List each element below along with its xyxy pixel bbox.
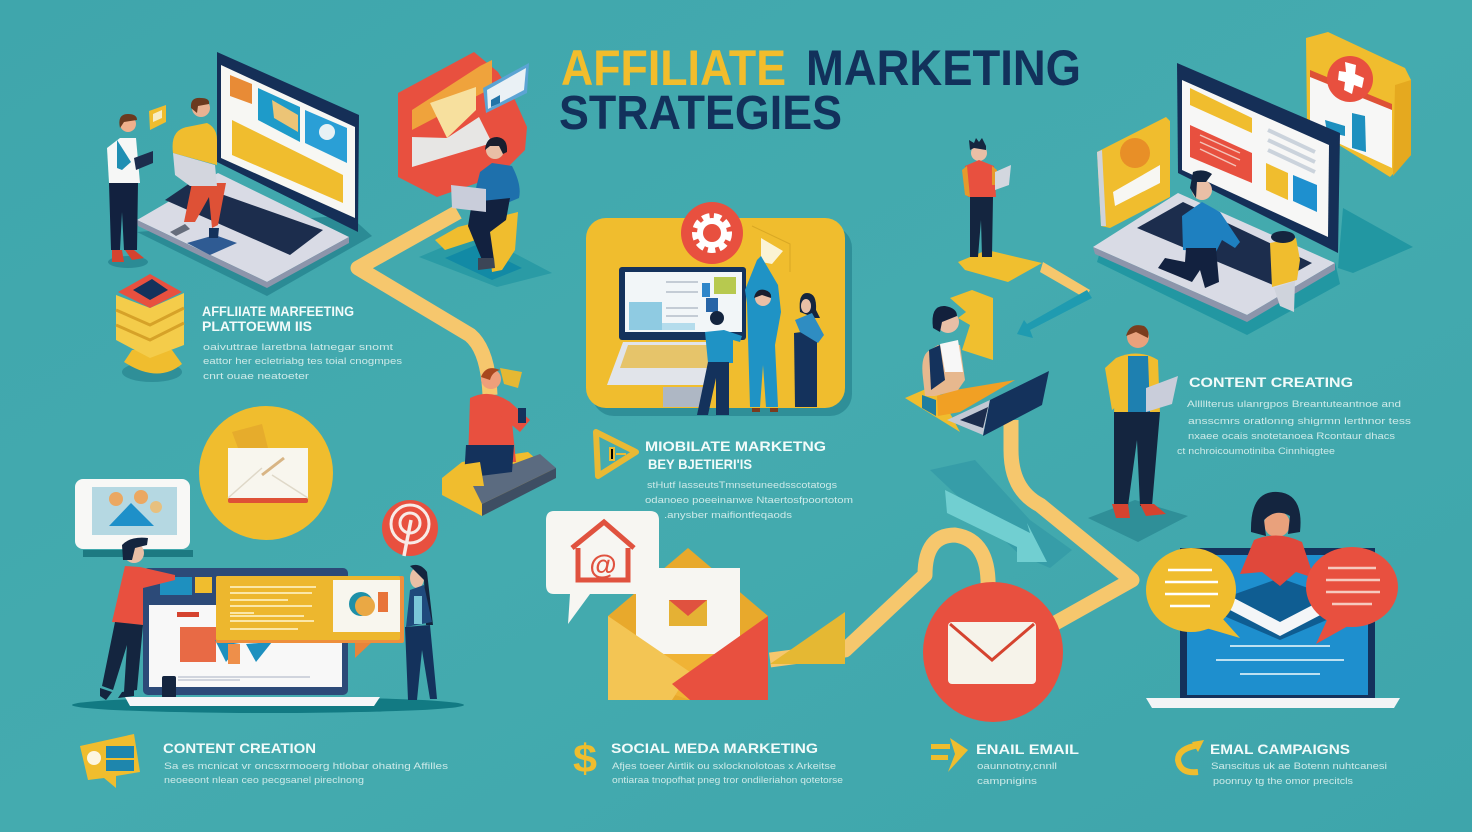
card: yellow shield left bbox=[1097, 117, 1170, 228]
text: affiliate marketing platforms: AFFLIIATE MARFEETING bbox=[202, 303, 354, 319]
text: email campaigns: Sanscitus uk ae Botenn nuhtcanesi bbox=[1211, 761, 1387, 772]
icon: speed arrow bbox=[931, 738, 968, 772]
illustration: top right laptop scene bbox=[1093, 32, 1413, 335]
title: AFFILIATE bbox=[561, 40, 786, 96]
text: email email: ENAIL EMAIL bbox=[976, 741, 1080, 757]
icon: yellow box with coins bbox=[1270, 231, 1300, 312]
card: red cross bbox=[1306, 32, 1411, 177]
text: affiliate marketing platforms: cnrt ouae neatoeter bbox=[203, 371, 309, 382]
text: content creating: Alllllterus ulanrgpos Breantuteantnoe and bbox=[1187, 399, 1401, 410]
icon: yellow play triangle bbox=[596, 432, 636, 476]
text: mobilate marketing: stHutf IasseutsTmnsetuneedsscotatogs bbox=[647, 480, 837, 491]
text: mobilate marketing: MIOBILATE MARKETNG bbox=[645, 438, 826, 454]
envelope bbox=[608, 548, 768, 700]
illustration: person on platform with phone bbox=[442, 368, 556, 516]
illustration: bubble and open envelope bbox=[546, 511, 768, 700]
people group bbox=[697, 256, 824, 415]
text: content creation: Sa es mcnicat vr oncsxrmooerg htlobar ohating Affilles bbox=[164, 761, 448, 772]
text: social media marketing bbox=[611, 740, 843, 786]
speech bubble with photo bbox=[75, 479, 193, 557]
connector path: right upper arrow bbox=[950, 262, 1092, 360]
icon: red gear bbox=[681, 202, 743, 264]
title bbox=[559, 40, 1081, 140]
icon: dollar sign: $ bbox=[573, 737, 597, 781]
person: seated with laptop bbox=[419, 137, 552, 287]
person: standing man with tablet bbox=[107, 114, 153, 268]
icon: play tag bbox=[752, 226, 790, 272]
text: mobilate marketing: odanoeo poeeinanwe Ntaertosfpoortotom bbox=[645, 495, 853, 506]
illustration: top centre-right standing man bbox=[958, 138, 1042, 282]
text: affiliate marketing platforms: eattor her ecletriabg tes toial cnogmpes bbox=[203, 356, 402, 367]
title: STRATEGIES bbox=[559, 87, 842, 140]
text: mobilate marketing bbox=[645, 438, 853, 521]
text: content creation: CONTENT CREATION bbox=[163, 740, 316, 756]
speech card: yellow text bbox=[216, 576, 404, 658]
text: content creating: ct nchroicoumotiniba Cinnhiqgtee bbox=[1177, 446, 1335, 457]
arrow: olive triangle bbox=[770, 612, 845, 664]
illustration: woman seated at laptop bbox=[905, 306, 1049, 436]
text: email email: campnigins bbox=[977, 776, 1037, 787]
person: seated man on laptop bbox=[170, 98, 226, 238]
person: man pointing bbox=[100, 538, 175, 700]
text: social media marketing: SOCIAL MEDA MARKETING bbox=[611, 740, 818, 756]
icon: yellow C with arrow bbox=[1178, 740, 1204, 772]
text: email campaigns: poonruy tg the omor precitcls bbox=[1213, 776, 1353, 787]
connector path: top left ribbon bbox=[358, 212, 490, 395]
text: content creation: neoeeont nlean ceo pecgsanel pireclnong bbox=[164, 775, 364, 786]
illustration: top left laptop scene bbox=[107, 52, 372, 296]
icon: yellow circle envelope bbox=[199, 406, 333, 540]
icon: small yellow chat bbox=[149, 105, 166, 130]
text: affiliate marketing platforms: PLATTOEWM IIS bbox=[202, 318, 312, 334]
text: email email bbox=[976, 741, 1080, 787]
person: kneeling man bbox=[1158, 170, 1240, 288]
speech bubble: red bbox=[1306, 547, 1398, 644]
text: affiliate marketing platforms: oaivuttrae laretbna latnegar snomt bbox=[203, 342, 393, 353]
laptop with screen bbox=[125, 568, 380, 706]
icon: stacked yellow layers bbox=[116, 274, 184, 382]
text: affiliate marketing platforms bbox=[202, 303, 402, 382]
text: email campaigns: EMAL CAMPAIGNS bbox=[1210, 741, 1350, 757]
title: MARKETING bbox=[806, 40, 1081, 96]
person: woman bbox=[405, 565, 437, 700]
text: email campaigns bbox=[1210, 741, 1387, 787]
panel: mobile marketing yellow card bbox=[586, 202, 852, 416]
speech bubble: home at: @ bbox=[589, 549, 617, 580]
speech bubble: home at bbox=[546, 511, 659, 624]
icon: pinterest pin bbox=[382, 500, 438, 556]
text: content creating bbox=[1177, 374, 1411, 457]
illustration: red isometric envelope with person bbox=[398, 52, 552, 287]
text: mobilate marketing: BEY BJETIERI'IS bbox=[648, 456, 752, 472]
text: content creation bbox=[163, 740, 448, 786]
speech bubble: yellow bbox=[1146, 548, 1240, 638]
text: social media marketing: ontiaraa tnopofhat pneg tror ondileriahon qotetorse bbox=[612, 775, 843, 786]
text: content creating: ansscmrs oratlonng shigrmn lerthnor tess bbox=[1188, 416, 1411, 427]
text: content creating: CONTENT CREATING bbox=[1189, 374, 1353, 390]
illustration: standing man with laptop (content creating) bbox=[1088, 325, 1188, 542]
arrow: pale teal chevrons bbox=[930, 460, 1072, 568]
text: content creating: nxaee ocais snotetanoea Rcontaur dhacs bbox=[1188, 431, 1395, 442]
connector path: lower ribbon bbox=[770, 420, 1132, 660]
icon: red circle envelope bbox=[923, 582, 1063, 722]
person: woman at top bbox=[1240, 492, 1314, 586]
text: email email: oaunnotny,cnnll bbox=[977, 761, 1057, 772]
text: social media marketing: Afjes toeer Airtlik ou sxlocknolotoas x Arkeitse bbox=[612, 761, 836, 772]
text: mobilate marketing: .anysber maifiontfeqaods bbox=[664, 510, 792, 521]
illustration: email campaigns laptop bbox=[1146, 492, 1400, 708]
laptop bbox=[607, 267, 746, 407]
icon: yellow chat square bbox=[80, 734, 140, 788]
illustration: content creation scene bbox=[72, 479, 464, 713]
